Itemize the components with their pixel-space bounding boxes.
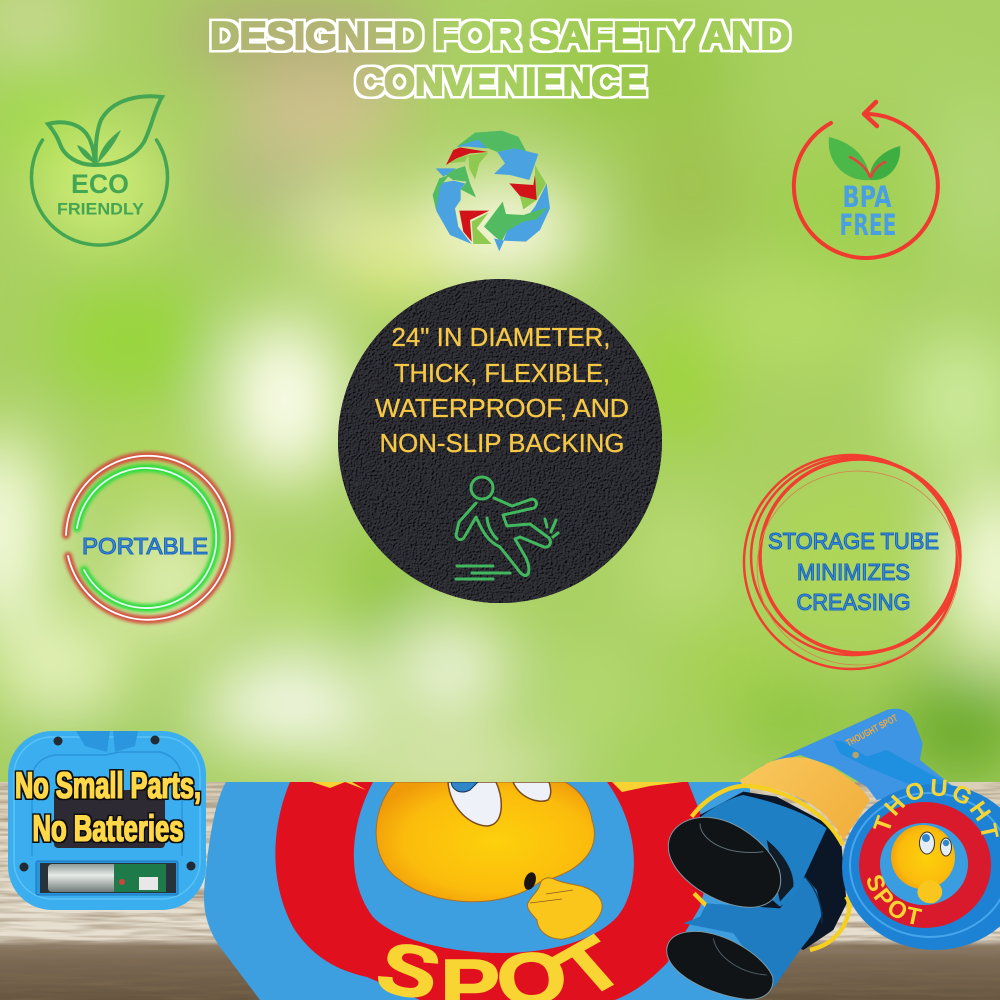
- tube body: [760, 709, 953, 800]
- emoji hand: [527, 878, 602, 939]
- icon: eco friendly badge: [31, 96, 168, 245]
- icon: storage tube ring badge: MINIMIZES: [797, 559, 910, 585]
- device battery: [36, 861, 178, 895]
- device callout text: No Small Parts,: [15, 765, 201, 806]
- device callout text: [15, 765, 201, 849]
- lower mat roll: [667, 877, 823, 999]
- disc text: NON-SLIP BACKING: [380, 430, 624, 458]
- icon: person slipping: [456, 477, 558, 579]
- emoji face: [376, 782, 594, 902]
- lid lettering: THOUGHT: [873, 778, 999, 838]
- icon: portable ring badge: PORTABLE: [82, 533, 208, 559]
- icon: bpa free badge: BPA: [842, 180, 892, 214]
- storage tube lid: [842, 778, 1000, 950]
- disc text: THICK, FLEXIBLE,: [394, 360, 610, 388]
- icon: storage tube ring badge: [738, 444, 970, 669]
- orange tube band: [740, 757, 870, 840]
- tube interior: [700, 792, 847, 950]
- title: DESIGNED FOR SAFETY AND: [210, 15, 790, 58]
- rolled mat with thinking emoji: [204, 782, 760, 1000]
- disc text: [375, 324, 629, 458]
- tube label: THOUGHT SPOT: [845, 713, 900, 749]
- icon: eco friendly badge: ECO: [71, 169, 129, 199]
- icon: bpa free badge: FREE: [840, 208, 896, 242]
- icon: eco friendly badge: FRIENDLY: [57, 200, 145, 218]
- emoji eyes: [448, 782, 551, 826]
- device screen: [54, 790, 165, 848]
- device: battery-free back panel: [8, 731, 206, 910]
- wooden plank: [0, 782, 1000, 1000]
- icon: portable ring badge: [66, 456, 230, 620]
- title: [210, 15, 790, 104]
- panel: non-slip textured disc: [338, 279, 662, 603]
- disc text: 24" IN DIAMETER,: [392, 324, 610, 352]
- disc text: WATERPROOF, AND: [375, 395, 629, 423]
- storage tube and rolled mat ends: [667, 709, 953, 999]
- yellow tube rim: [692, 786, 849, 950]
- icon: recycling symbol: [433, 131, 550, 251]
- icon: bpa free badge: [794, 102, 938, 258]
- lid lettering: SPOT: [867, 875, 922, 924]
- tube strap: [833, 740, 953, 787]
- icon: storage tube ring badge: STORAGE TUBE: [768, 528, 939, 554]
- lid lettering: [867, 778, 999, 924]
- upper mat roll: [668, 795, 827, 907]
- device callout text: No Batteries: [32, 808, 184, 849]
- title: CONVENIENCE: [356, 61, 646, 104]
- icon: storage tube ring badge: CREASING: [796, 589, 910, 615]
